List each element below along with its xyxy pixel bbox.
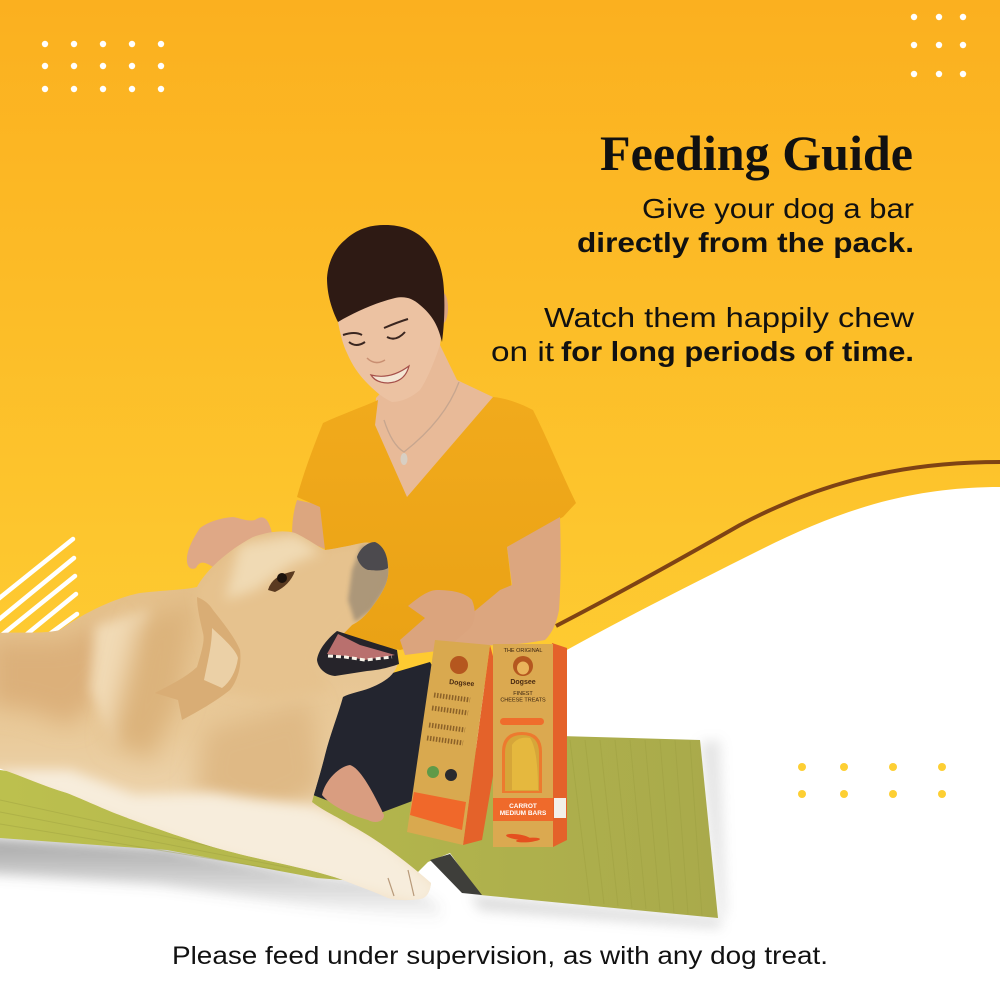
head tint	[206, 532, 388, 632]
side panel	[552, 643, 567, 847]
white diagonal stripes	[0, 539, 77, 636]
product box: front view	[493, 643, 567, 847]
petting hand	[187, 517, 272, 569]
orange flavour band: MEDIUM BARS	[500, 810, 547, 817]
title: Feeding Guide	[600, 125, 913, 181]
yoga mat	[0, 736, 718, 918]
brand: Dogsee	[510, 679, 536, 686]
side barcode	[554, 798, 566, 818]
dog	[0, 517, 440, 905]
instruction text	[491, 193, 915, 367]
dots: top left	[42, 41, 164, 92]
back copy lines	[427, 695, 470, 743]
instruction text: Give your dog a bar	[642, 193, 914, 224]
supervision note: Please feed under supervision, as with any dog treat.	[172, 942, 828, 970]
original label: THE ORIGINAL	[504, 648, 542, 654]
dark trousers	[300, 662, 440, 815]
background	[0, 0, 1000, 760]
product box: back view	[407, 640, 494, 845]
pendant	[400, 453, 408, 465]
carrots	[506, 833, 540, 843]
bare foot	[322, 765, 384, 822]
white wave panel	[0, 487, 1000, 1000]
mat shadow	[0, 740, 726, 928]
window with treat	[502, 732, 542, 793]
eye	[268, 571, 295, 592]
product line: FINEST	[513, 691, 533, 697]
paw toes	[388, 870, 414, 896]
back shading	[0, 626, 95, 728]
front panel	[493, 644, 553, 847]
necklace	[384, 382, 459, 452]
orange flavour band	[493, 798, 553, 821]
instruction text: for long periods of time.	[561, 336, 914, 367]
box side	[463, 645, 494, 845]
orange pill	[500, 718, 544, 725]
short dark hair	[327, 225, 444, 342]
left arm	[292, 500, 327, 550]
eyes and brows	[343, 319, 408, 345]
dog logo	[513, 656, 533, 676]
dots: top right	[911, 14, 966, 77]
nose shadow	[367, 358, 385, 363]
certification seals	[427, 766, 457, 781]
dog body and head	[0, 525, 440, 905]
yellow shirt	[297, 397, 576, 650]
holding hand	[400, 590, 475, 655]
ear flap	[155, 597, 241, 720]
instruction text: Watch them happily chew	[544, 302, 915, 333]
belly and leg cream	[0, 770, 440, 905]
instruction text: directly from the pack.	[577, 227, 914, 258]
smile	[371, 366, 409, 383]
dots: yellow lower right	[798, 763, 946, 798]
orange label	[410, 792, 466, 830]
product line: CHEESE TREATS	[500, 698, 546, 704]
instruction text: on it	[491, 336, 554, 367]
ear	[438, 293, 448, 323]
grey muzzle	[348, 545, 392, 622]
nose	[357, 542, 388, 570]
person	[292, 225, 576, 822]
brand: Dogsee	[449, 679, 475, 688]
brown wave line	[556, 462, 1000, 626]
box back face	[407, 640, 490, 845]
ear inner fur	[204, 628, 238, 688]
right arm	[440, 517, 561, 645]
open mouth	[317, 631, 399, 676]
dog logo	[450, 656, 468, 674]
orange flavour band: CARROT	[509, 803, 537, 810]
neck and chest	[375, 345, 495, 498]
face	[338, 295, 443, 402]
